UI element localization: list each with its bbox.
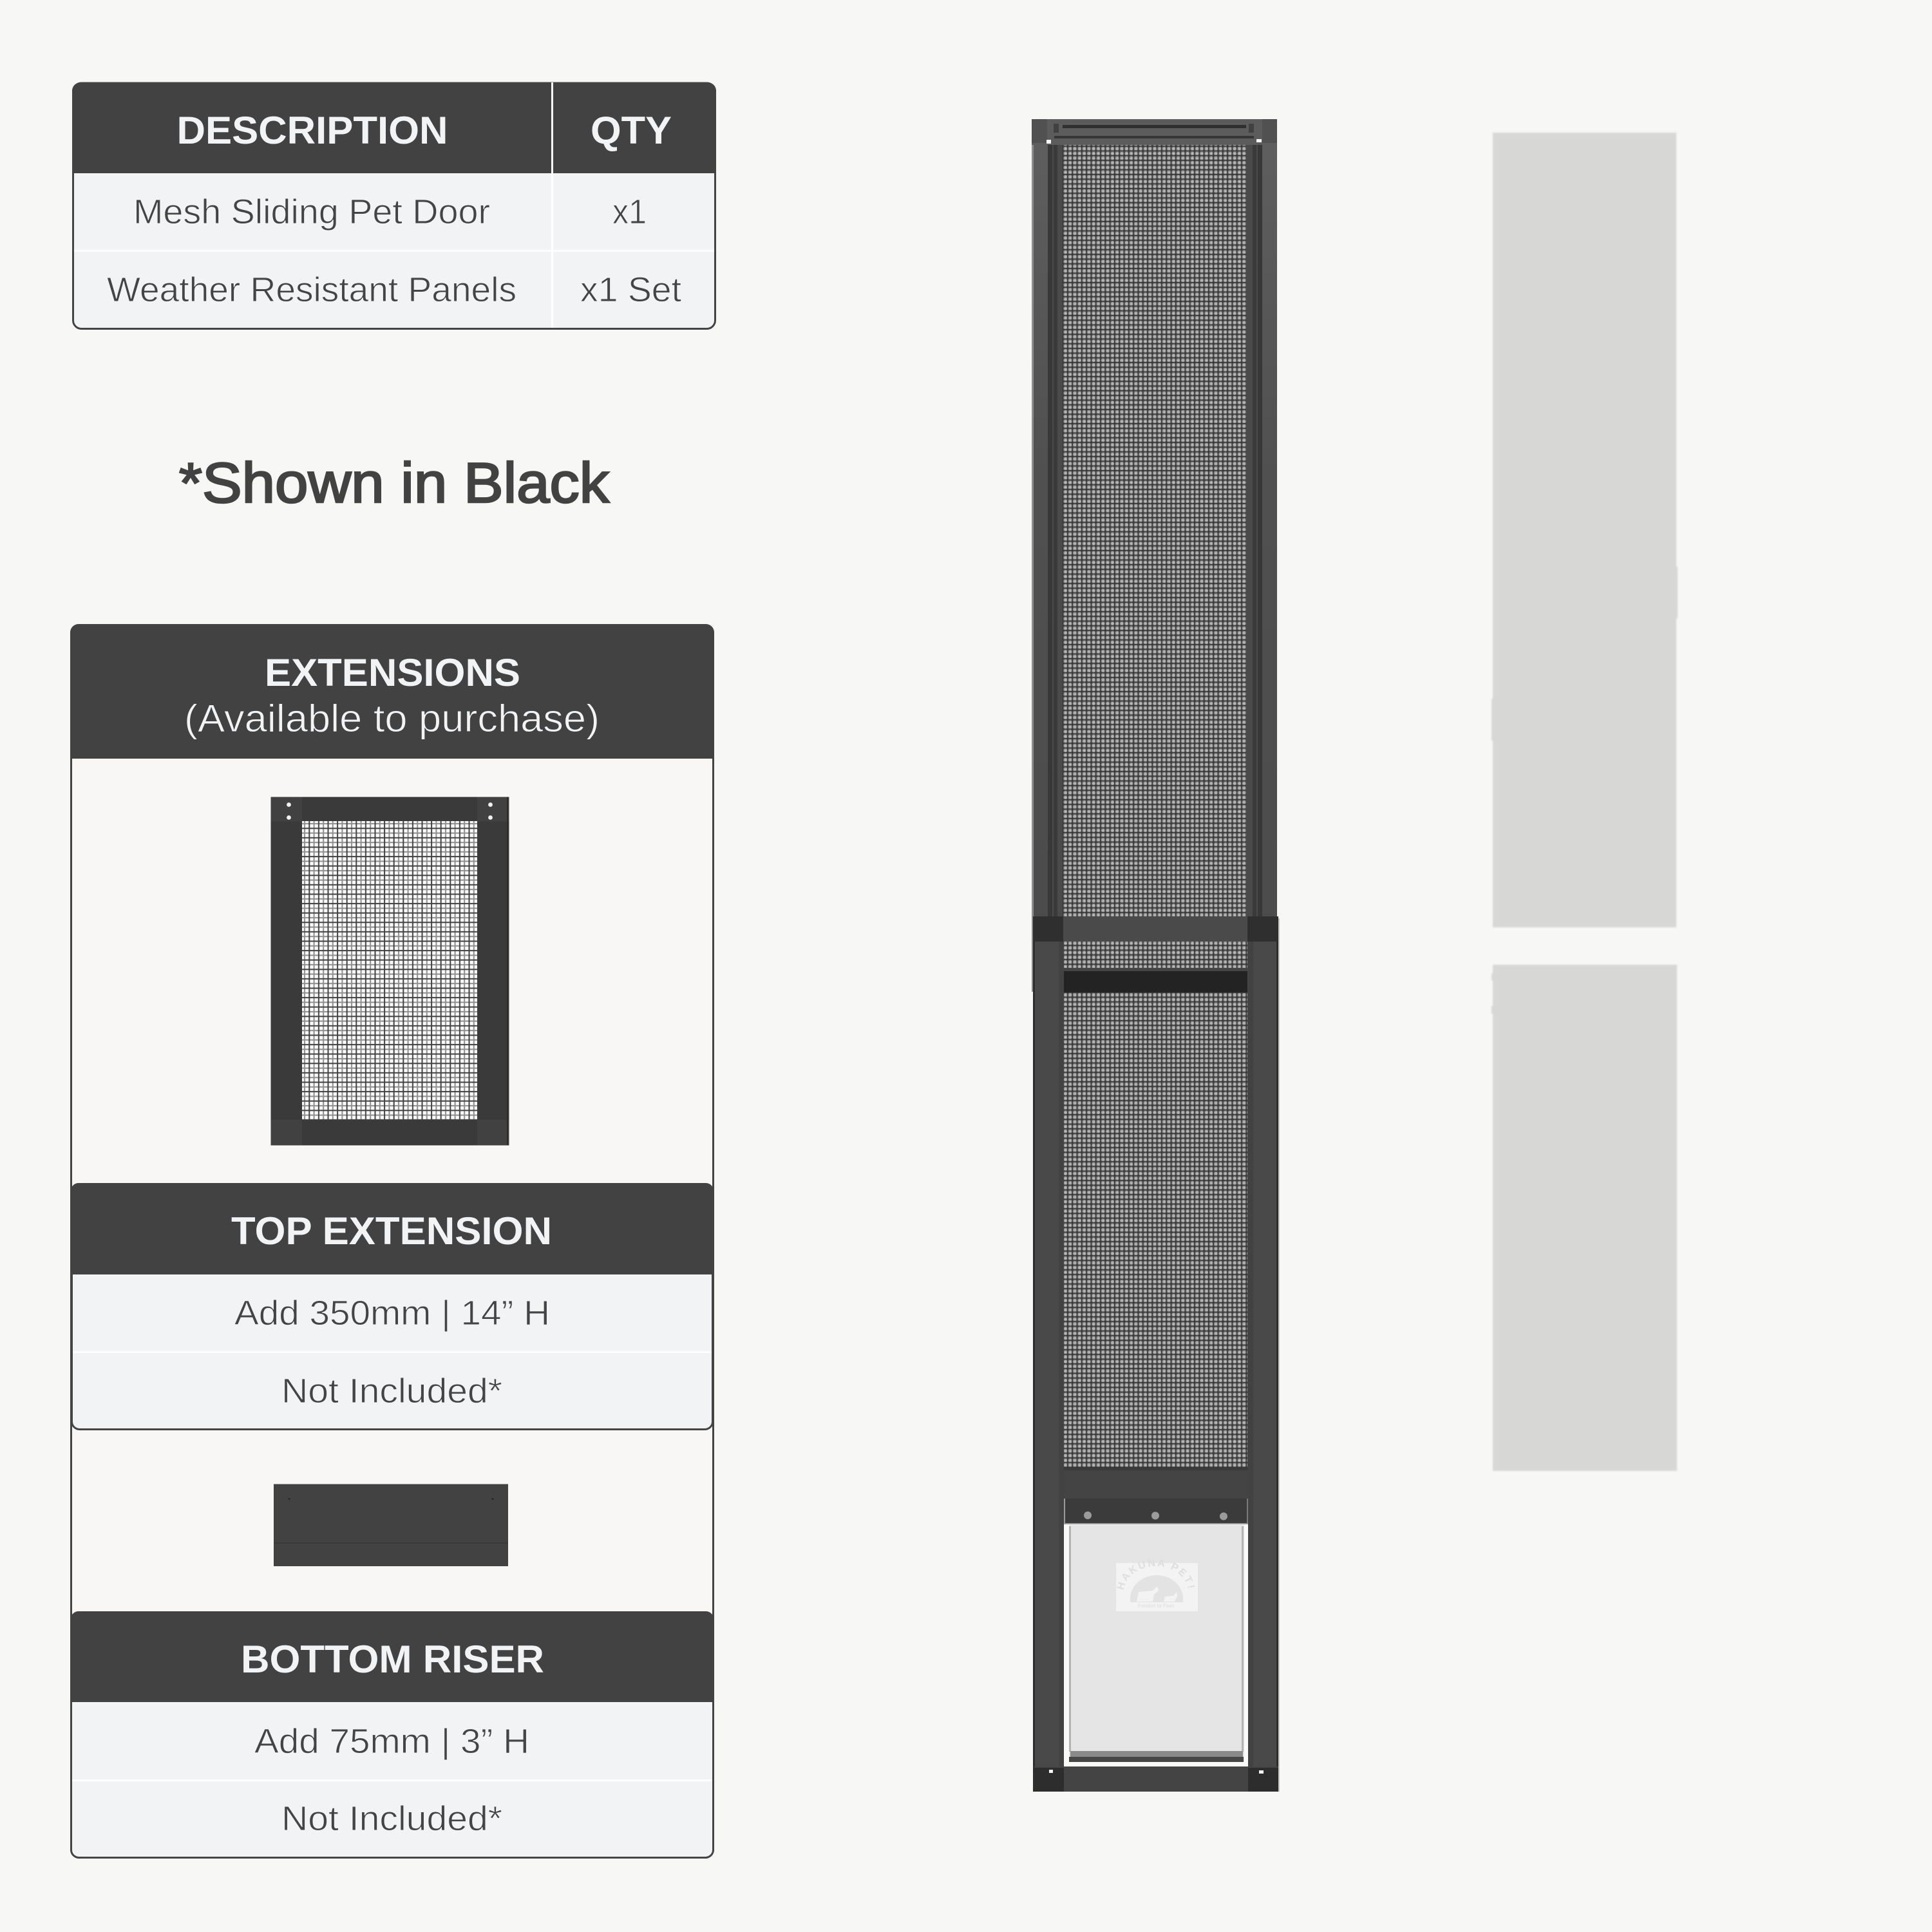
upper frame: [1032, 119, 1277, 992]
bottom riser size: Add 75mm | 3” H: [254, 1722, 529, 1761]
upper mesh screen: [1063, 145, 1246, 916]
sub-table: top extension: [71, 1183, 714, 1430]
top extension not included: Not Included*: [281, 1372, 502, 1410]
ghost: lower weather panel: [1492, 965, 1677, 1471]
header: qty: QTY: [591, 109, 672, 152]
extensions title: EXTENSIONS: [265, 651, 520, 694]
flap housing: [1064, 1468, 1248, 1524]
extensions subtitle: (Available to purchase): [184, 697, 600, 740]
ghost: upper weather panel: [1492, 133, 1678, 927]
extensions header: [70, 624, 714, 759]
note: shown in black: *Shown in Black: [179, 451, 610, 515]
bottom riser title: BOTTOM RISER: [241, 1638, 544, 1681]
top extension header: [71, 1183, 714, 1274]
panel: extensions: [70, 624, 714, 1857]
image: top extension panel: [270, 797, 509, 1145]
table header row: [72, 82, 716, 173]
panel: contents table: [72, 82, 716, 328]
flap logo: [1116, 1563, 1198, 1611]
bottom riser header: [71, 1611, 714, 1702]
brush seal: [1064, 968, 1247, 992]
mounting holes: [287, 802, 493, 820]
flap logo: HAKUNA PET!: [1117, 1563, 1195, 1589]
sub-table: bottom riser: [71, 1611, 714, 1857]
row 1 quantity: x1: [612, 193, 647, 231]
top extension title: TOP EXTENSION: [231, 1209, 552, 1253]
lower frame: [1033, 918, 1280, 1792]
lower mesh screen: [1064, 942, 1247, 1468]
row 2 quantity: x1 Set: [580, 270, 681, 309]
product: mesh sliding pet door: [1032, 119, 1280, 1792]
header: description: DESCRIPTION: [176, 109, 448, 152]
meeting rail: [1033, 916, 1278, 942]
bottom rail: [1034, 1766, 1278, 1792]
flap logo: Freedom for Paws: [1138, 1603, 1174, 1609]
top extension size: Add 350mm | 14” H: [234, 1294, 550, 1332]
row 2 description: Weather Resistant Panels: [107, 270, 516, 309]
row 1 description: Mesh Sliding Pet Door: [133, 193, 490, 231]
extension mesh: [302, 821, 477, 1121]
pet flap: [1064, 1523, 1248, 1766]
housing screws: [1084, 1511, 1227, 1520]
image: bottom riser: [274, 1484, 508, 1566]
bottom riser not included: Not Included*: [281, 1799, 502, 1838]
